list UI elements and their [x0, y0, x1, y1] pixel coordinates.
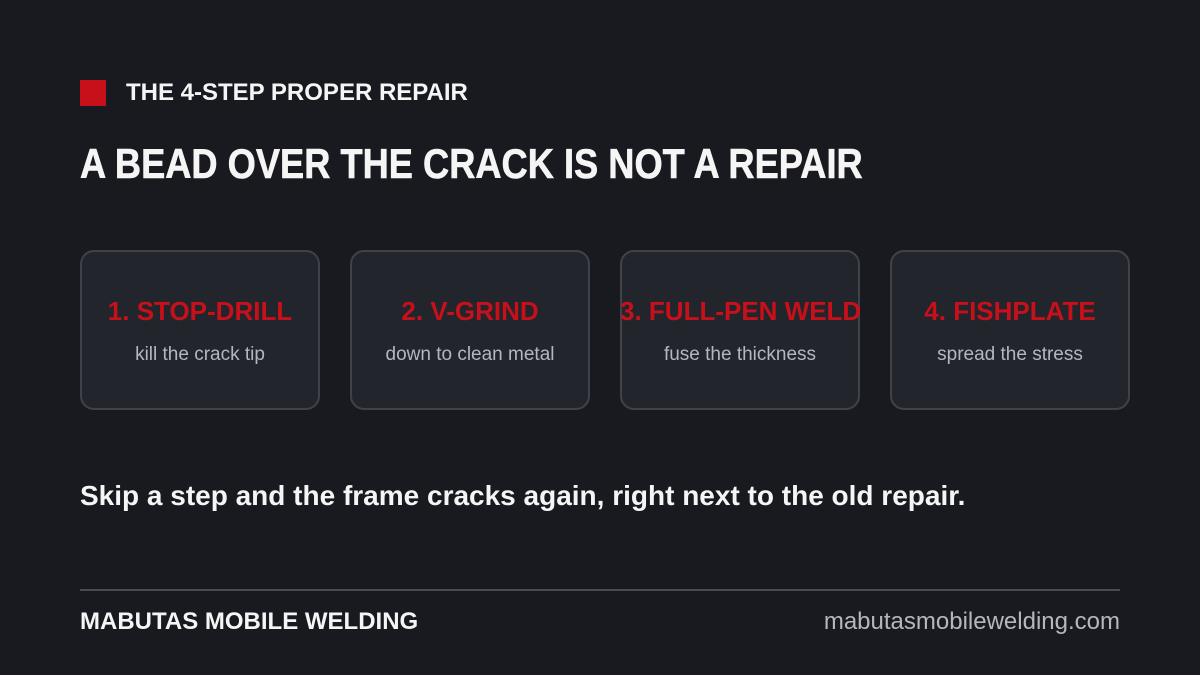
title: A BEAD OVER THE CRACK IS NOT A REPAIR — [80, 140, 863, 187]
step 1 description: kill the crack tip — [135, 344, 265, 365]
red square marker — [80, 80, 106, 106]
panel: step 3 full-pen weld — [620, 250, 860, 410]
footer website: mabutasmobilewelding.com — [824, 608, 1120, 635]
panel: step 4 fishplate — [890, 250, 1130, 410]
panel: step 1 stop-drill — [80, 250, 320, 410]
step 3 heading: 3. FULL-PEN WELD — [620, 296, 861, 326]
footer brand name: MABUTAS MOBILE WELDING — [80, 608, 418, 635]
step 2 heading: 2. V-GRIND — [401, 296, 539, 326]
step 3 description: fuse the thickness — [664, 344, 816, 365]
takeaway statement: Skip a step and the frame cracks again, right next to the old repair. — [80, 480, 965, 511]
panel: step 2 v-grind — [350, 250, 590, 410]
eyebrow heading: THE 4-STEP PROPER REPAIR — [126, 79, 468, 106]
step 4 description: spread the stress — [937, 344, 1083, 365]
step 4 heading: 4. FISHPLATE — [924, 296, 1096, 326]
step 1 heading: 1. STOP-DRILL — [108, 296, 292, 326]
step 2 description: down to clean metal — [386, 344, 554, 365]
